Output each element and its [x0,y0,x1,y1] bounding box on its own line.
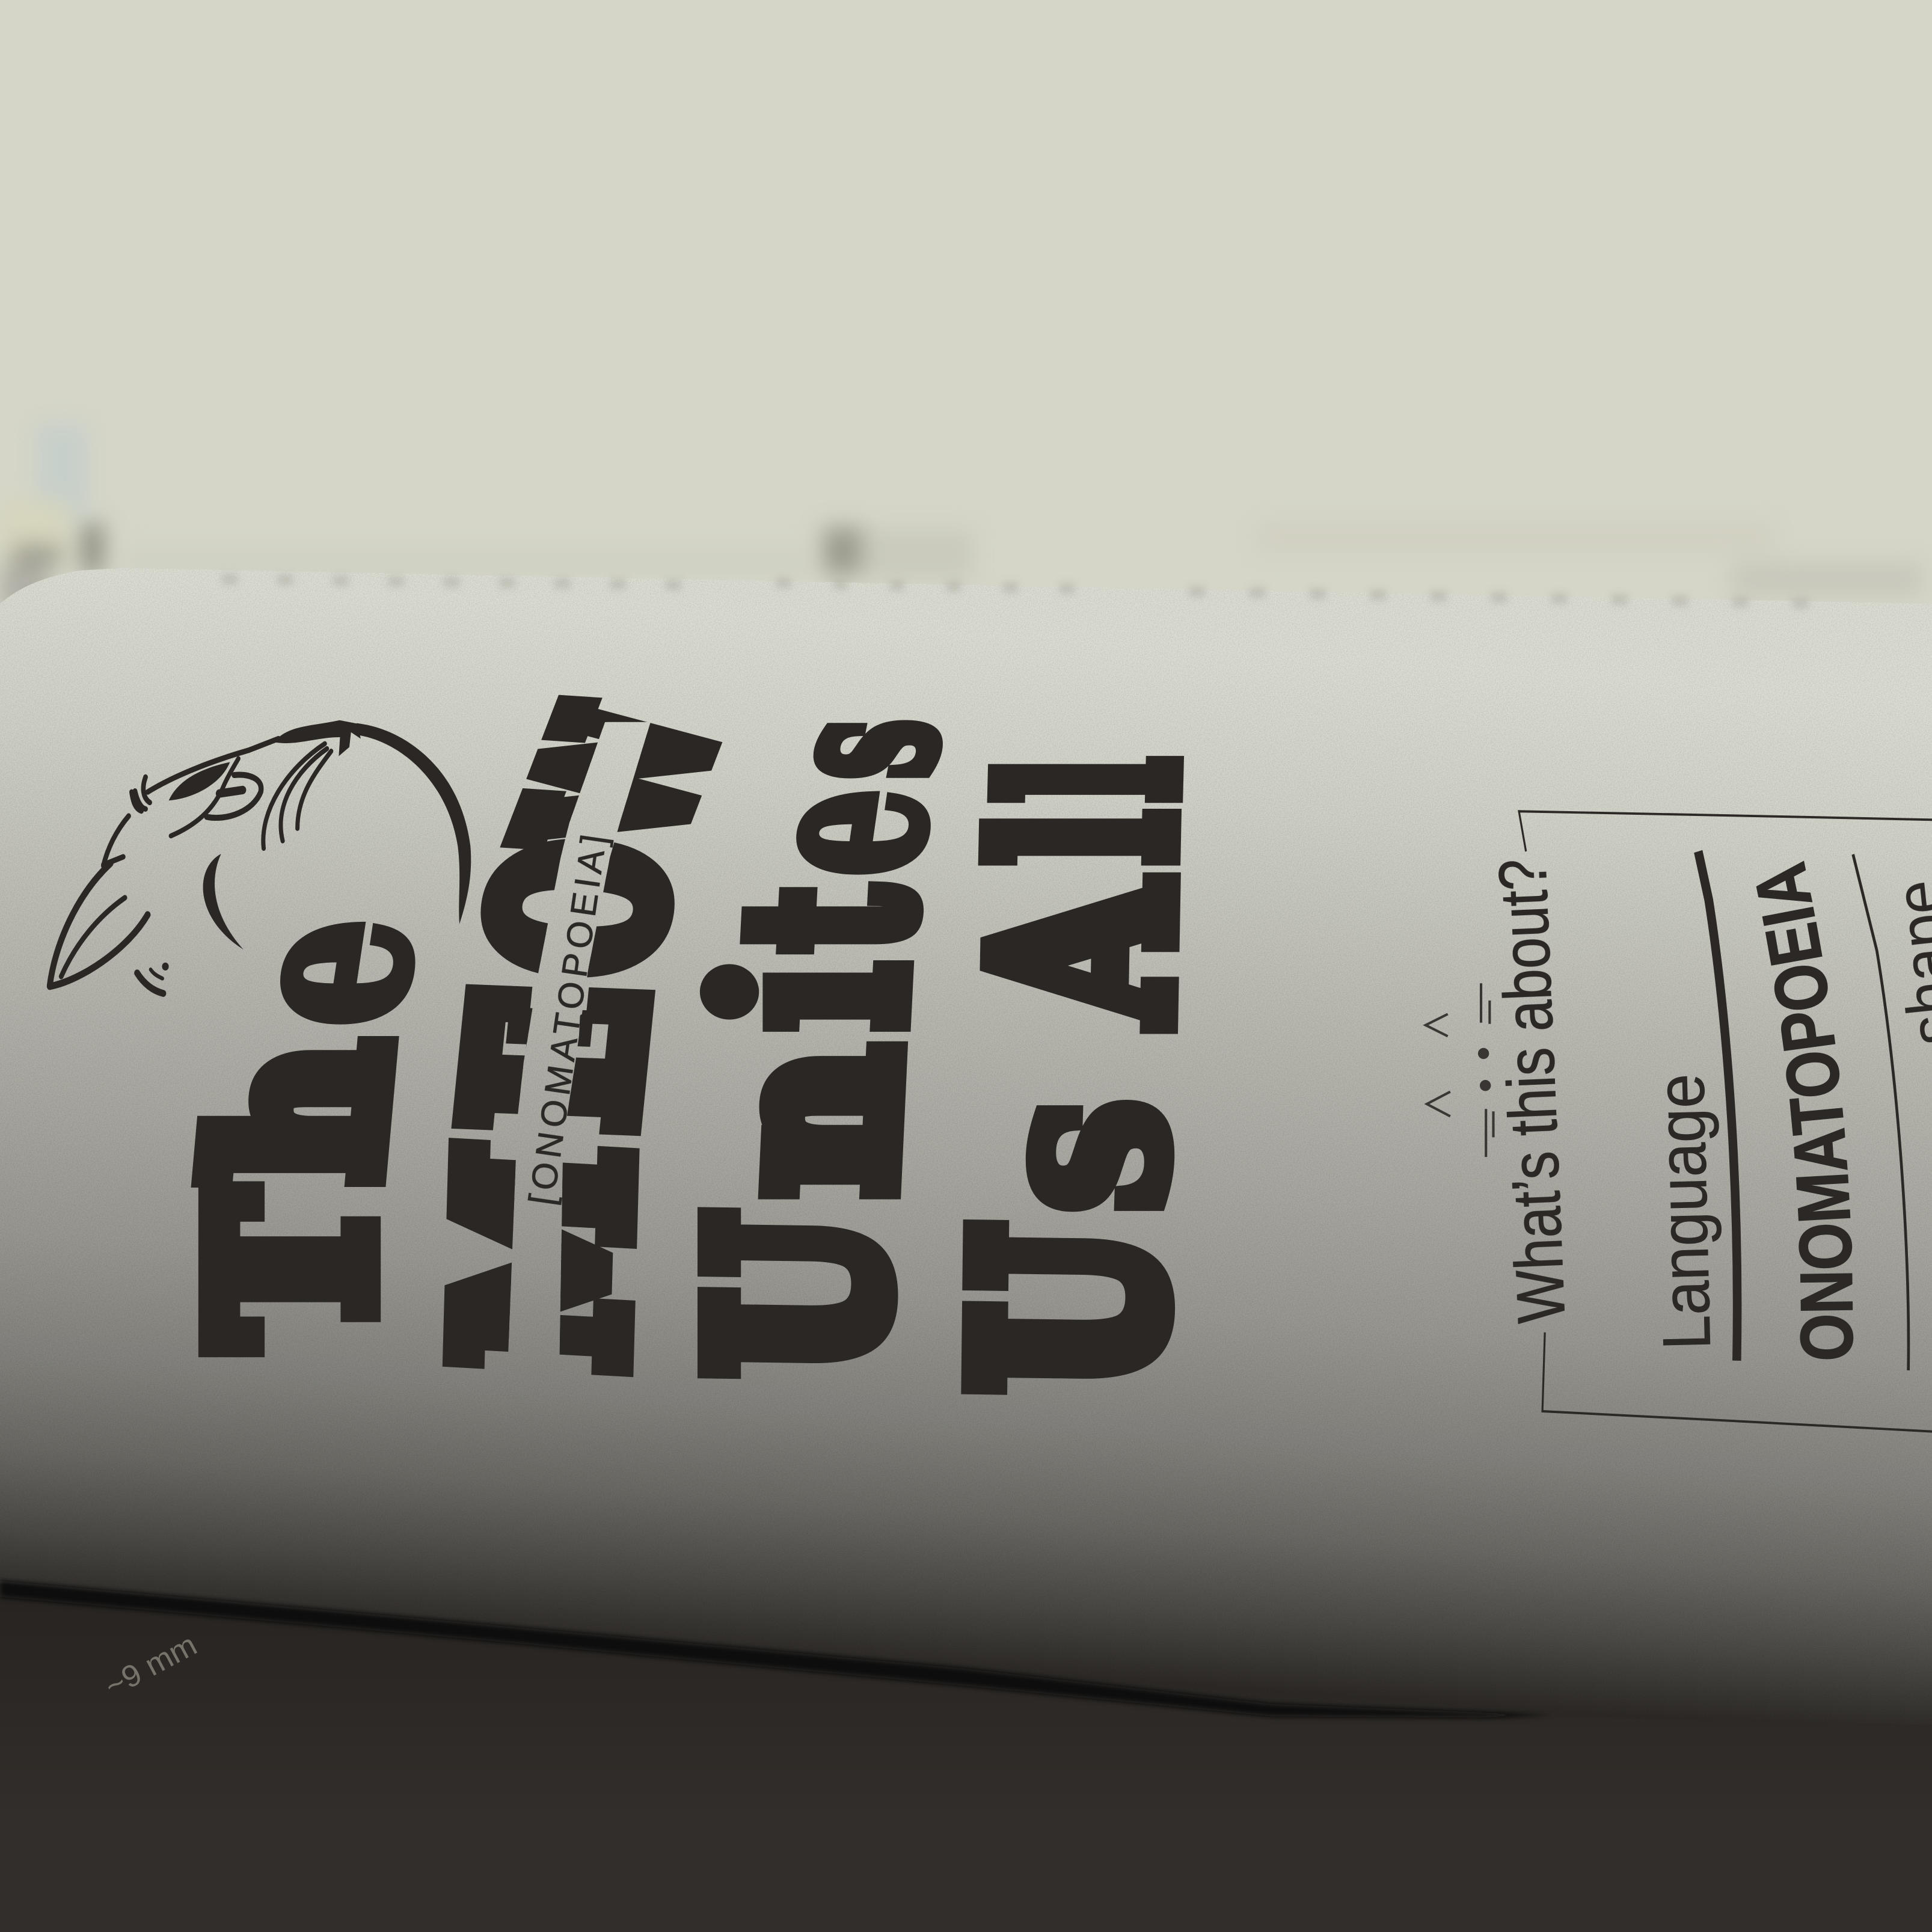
dot of the i [700,964,759,1020]
title: Us All: l [950,813,1224,863]
title: Unites [665,719,988,1376]
heading: What's this about?: What’s this about? [1484,857,1579,1325]
title: Unites: s [732,719,988,779]
perforation marks along the top page edge [222,579,1836,604]
title: Unites: t [694,888,963,950]
small bars around the A in the band [526,1014,582,1043]
title: The: e [187,918,468,1028]
title: Us All: A [941,880,1226,1026]
title: MEOW, stencil-cut by the pronunciation band [443,695,723,1377]
faint measurement label: ~9 mm [99,1627,202,1704]
title: MEOW, stencil-cut by the pronunciation band: M [410,1139,678,1375]
title: MEOW, stencil-cut by the pronunciation band: E [420,984,693,1134]
rule under Language [1698,851,1737,1361]
title: Us All: l [960,759,1225,801]
title: The [167,918,468,1346]
title: Unites: U [665,1215,934,1376]
title: Us All: U [926,1227,1214,1392]
title: Us All [926,759,1226,1392]
title: The: T [168,1192,417,1346]
term: ONOMATOPOEIA on curved baseline: ONOMATOPOEIA [1756,861,1853,1359]
dark table surface [0,1565,1932,1932]
title: Unites: i [671,965,958,1028]
shadow under the page [0,1581,1553,1717]
icon: small emoticon face marks [1426,983,1494,1157]
title: Us All: s [934,1099,1222,1213]
title: MEOW, stencil-cut by the pronunciation band: W [478,702,764,853]
title: The: h [167,1044,437,1181]
label: onomatopoeia inside band: [ONOMATOPOEIA] [521,832,614,1207]
panel: curved paper page [0,560,1932,1731]
title: Unites: n [681,1050,946,1193]
thin divider [1853,854,1909,1370]
title: Unites: e [704,788,981,877]
panel: framed info box [1519,811,1932,1432]
category label: Language: Language [1642,1073,1725,1351]
icon: cat looking up [50,720,471,993]
title: MEOW, stencil-cut by the pronunciation band: O [444,836,717,980]
